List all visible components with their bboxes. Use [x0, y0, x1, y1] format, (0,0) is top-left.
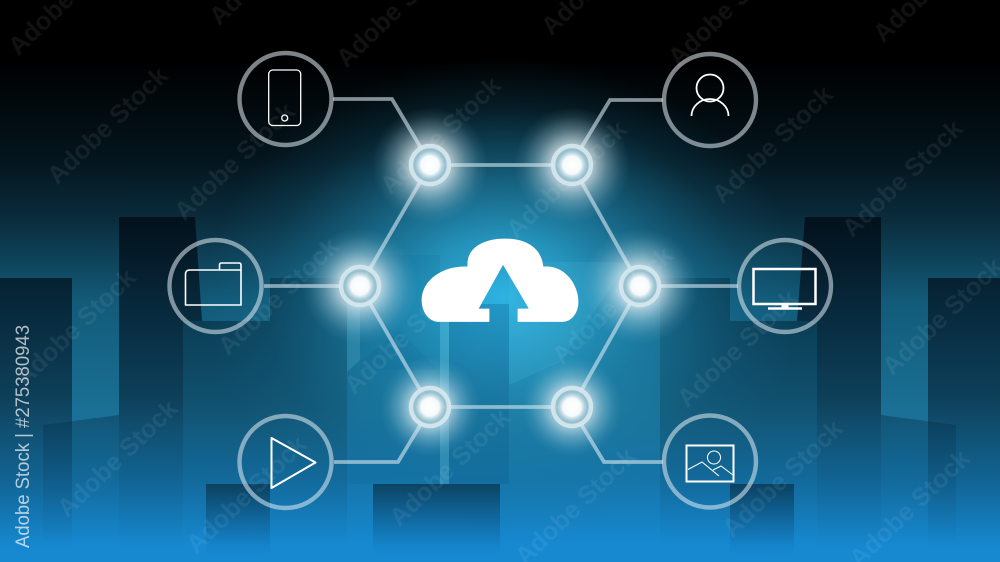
- watermarks: Adobe Stock: [10, 263, 142, 392]
- watermarks: Adobe Stock: [707, 80, 839, 209]
- icon: user: [692, 74, 728, 116]
- node glows: [302, 107, 698, 457]
- watermarks: Adobe Stock: [672, 284, 804, 413]
- watermarks: Adobe Stock: [547, 241, 679, 370]
- icon circles: [170, 53, 831, 508]
- icon: cloud with upload arrow: [422, 239, 578, 322]
- watermarks: Adobe Stock: [339, 271, 471, 400]
- watermarks: Adobe Stock: [42, 61, 174, 190]
- hexagon network lines: [264, 99, 738, 462]
- central building shapes: [206, 255, 794, 554]
- icon: play button: [272, 438, 316, 488]
- watermarks: Adobe Stock: [375, 71, 507, 200]
- watermarks: Adobe Stock: [717, 414, 849, 543]
- icon: image picture: [686, 446, 734, 482]
- watermarks: Adobe Stock: [837, 114, 969, 243]
- icon: folder: [186, 263, 241, 305]
- network nodes: [341, 146, 659, 426]
- central blue glow: [203, 58, 803, 538]
- watermarks: Adobe Stock: [384, 403, 516, 532]
- city skyline silhouettes: [0, 217, 1000, 551]
- icon: television: [754, 269, 816, 308]
- watermarks: Adobe Stock: [169, 97, 301, 226]
- watermarks: Adobe Stock: [213, 232, 345, 361]
- icon: smartphone: [269, 70, 301, 126]
- watermarks: Adobe Stock: [52, 394, 184, 523]
- watermarks: Adobe Stock: [181, 430, 313, 559]
- vertical stock id text: Adobe Stock | #275380943: [13, 325, 34, 548]
- watermarks: Adobe Stock: [501, 115, 633, 244]
